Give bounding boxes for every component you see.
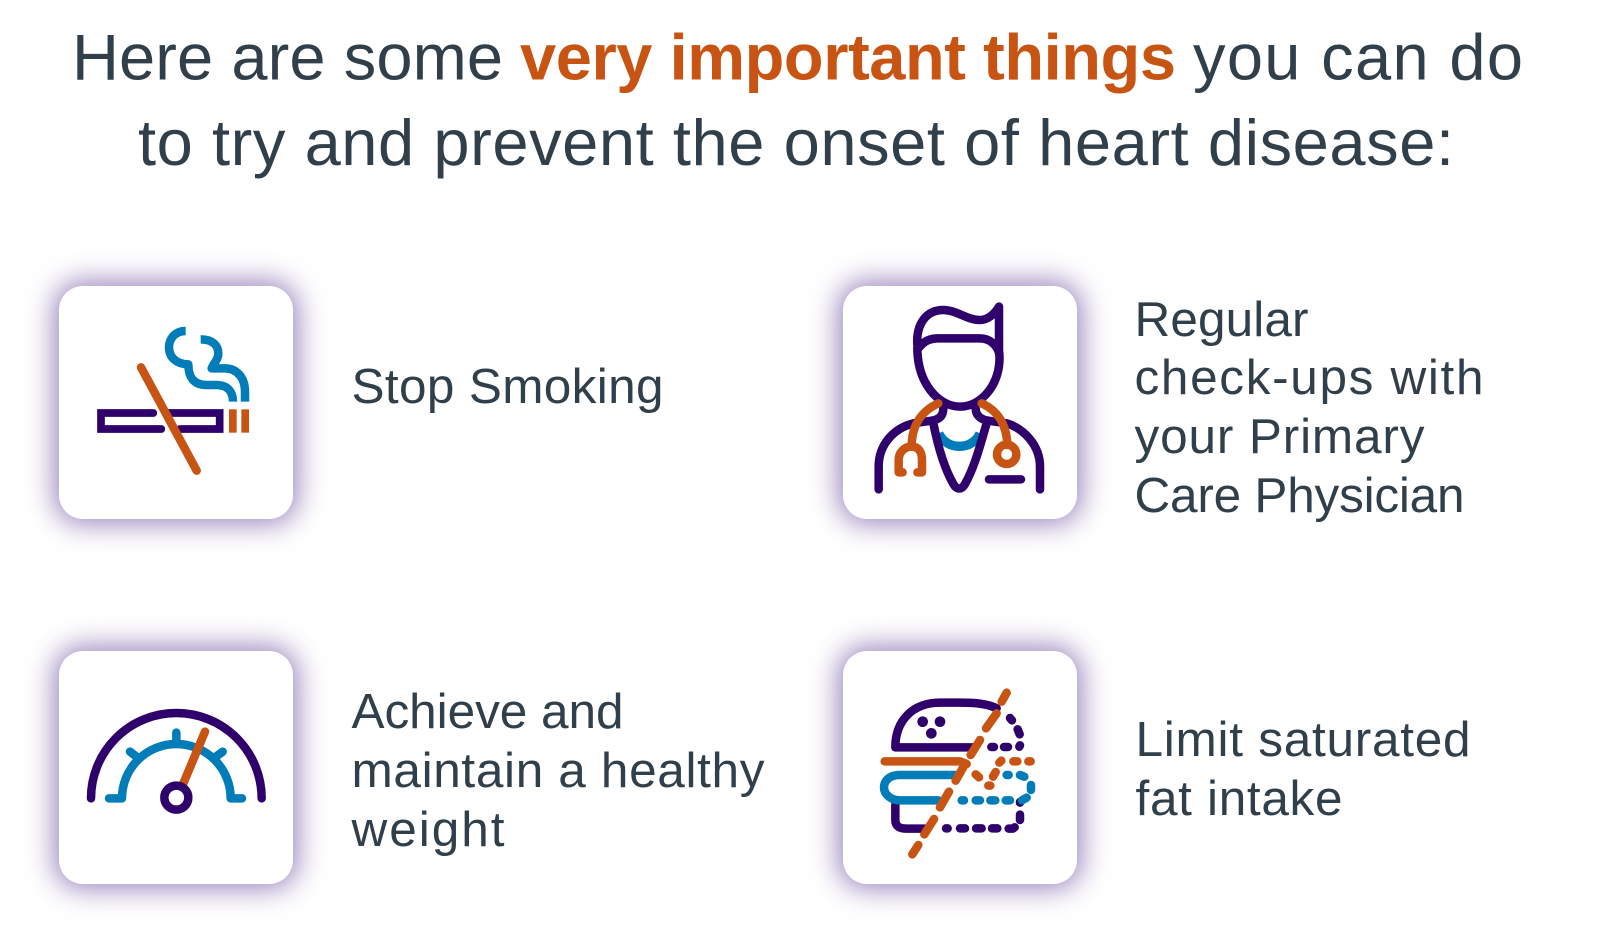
text: healthy weight: maintain a healthy xyxy=(352,743,765,798)
text: saturated fat: fat intake xyxy=(1135,771,1342,826)
text: saturated fat: Limit saturated xyxy=(1135,712,1470,767)
panel: regular check-ups xyxy=(818,262,1483,544)
icon: doctor with stethoscope xyxy=(874,302,1044,494)
text: stop smoking: Stop Smoking xyxy=(352,359,664,414)
text: healthy weight: Achieve and xyxy=(352,684,624,739)
icon card: doctor xyxy=(842,286,1076,519)
text: healthy weight: weight xyxy=(350,802,505,857)
title: Here are some xyxy=(72,20,503,94)
title: to try and prevent the onset of heart disease: xyxy=(138,106,1454,179)
text: healthy weight xyxy=(350,684,765,857)
icon card: burger xyxy=(842,651,1076,884)
title: you can do xyxy=(1193,20,1523,94)
icon: crossed-out cigarette xyxy=(97,326,250,475)
icon: weight gauge xyxy=(86,708,266,814)
icon card: gauge xyxy=(59,651,293,884)
text: regular check-ups: your Primary xyxy=(1134,409,1424,464)
panel: stop smoking xyxy=(34,262,664,544)
title xyxy=(72,20,1523,179)
title: very important things xyxy=(520,20,1176,94)
icon: crossed-out burger xyxy=(880,688,1036,859)
text: saturated fat xyxy=(1135,712,1470,826)
text: regular check-ups: Care Physician xyxy=(1134,468,1464,523)
panel: healthy weight xyxy=(34,626,765,908)
text: regular check-ups xyxy=(1134,292,1483,523)
panel: saturated fat xyxy=(818,626,1470,908)
text: regular check-ups: check-ups with xyxy=(1134,350,1483,405)
icon card: no smoking xyxy=(59,286,293,519)
text: regular check-ups: Regular xyxy=(1134,292,1308,347)
